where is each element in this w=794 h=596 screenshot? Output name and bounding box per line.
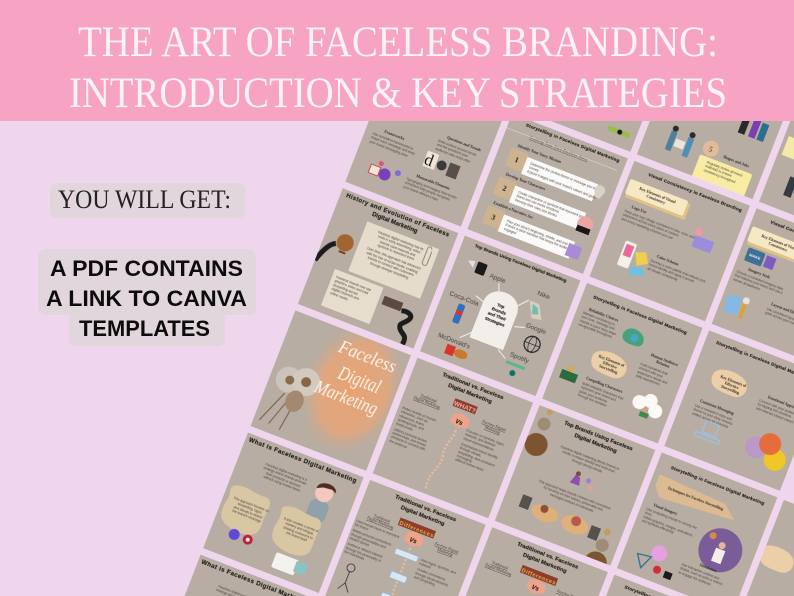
tombstone: Top (496, 302, 505, 310)
step 3: Ensure a clear narrative that keeps the audience (505, 223, 573, 252)
paper: main: symbols to represent them. (377, 243, 415, 262)
slide: storytelling steps (467, 113, 628, 274)
icon: dried flowers (259, 366, 320, 430)
slide: traditional vs differences: shared stories (349, 536, 370, 548)
slide: history and evolution: History and Evolution of Faceless (345, 193, 450, 239)
slide: storytelling circles: Key Elements of (720, 375, 747, 388)
step 2: 2 (501, 184, 508, 193)
slide: top brands circles (494, 405, 656, 566)
blob: right note: It also creates a sense of (283, 517, 319, 533)
slide: storytelling key elements: represent your brand and (580, 385, 616, 402)
slide: frameworks and identity: audience asks most often (435, 147, 471, 164)
slide: traditional vs differences: Uses human faces to represent (356, 519, 400, 539)
slide: frameworks and identity: your brand without a face (403, 185, 439, 202)
slide: traditional vs faceless what: Traditional vs. Faceless (441, 372, 504, 401)
icon: person (306, 483, 336, 522)
slide: storytelling key elements: Effective (602, 361, 618, 370)
slide: what is faceless: their products or services (265, 471, 301, 489)
slide: visual consistency banner: Consistency (646, 194, 666, 205)
blob: left note: and visuals to deliver (233, 505, 264, 520)
slide: top brands diagram: Coca-Cola (448, 290, 480, 308)
callout: pdf contents: TEMPLATES (79, 316, 210, 341)
slide: storytelling circles: theme so your story remains (693, 407, 733, 426)
slide: traditional vs faceless what: Focuses on symbols, logos, (466, 429, 505, 447)
paper: main: with the rise of social media, enabling (366, 251, 419, 274)
slide: storytelling techniques: Visual Imagery (653, 503, 678, 516)
slide: traditional vs faceless what: interaction, such as (400, 410, 428, 424)
slide: storytelling techniques: Utilize graphics, images, animations (643, 515, 693, 538)
title (69, 19, 727, 117)
paper: secondary: digital channels and (331, 287, 360, 301)
slide: storytelling steps: Crafting Your Own Faceless Story (529, 136, 588, 162)
paper: main: Over time, this approach has advanced (366, 246, 421, 271)
slide: top brands circles: Faceless digital marketing allows brands to (560, 445, 620, 471)
slide: visual consistency banner: all visuals consistently (647, 266, 679, 282)
slide: frameworks and identity: Use consistent frameworks to (372, 131, 414, 151)
slide: history and evolution: Digital Marketing (371, 212, 418, 235)
step 3: 3 (490, 213, 497, 222)
slide: what is faceless (203, 433, 364, 593)
paper: main: roots in early advertising, when (377, 235, 421, 255)
paper: secondary: graphics, video and bold (334, 279, 369, 296)
slide: traditional vs faceless what: Faceless Digital (482, 420, 506, 432)
step 3: Plan your story's beginning, middle, and end (506, 219, 568, 246)
slide: storytelling key elements: audience's needs and (637, 370, 668, 385)
step 3: Establish a Narrative Arc (493, 201, 534, 220)
slide: traditional vs faceless what: through visuals, (459, 446, 482, 458)
slide: storytelling key elements: Craft narratives that (640, 362, 668, 376)
slide: frameworks and identity (345, 121, 502, 226)
slide: visual consistency second: MAKE (749, 252, 762, 261)
slide: people and yellow note: consistency throughout (703, 168, 736, 184)
slide: frameworks and identity: Memorable Elements (416, 174, 451, 191)
slide: traditional vs faceless what: testimonials (396, 421, 414, 432)
blob: left note: storytelling, logos (237, 502, 263, 515)
slide: fragment right edge (746, 500, 794, 596)
tombstone (470, 291, 518, 350)
slide: storytelling circles: and relevant shared values (756, 406, 794, 424)
slide: traditional vs faceless what: mascots, and abstract (464, 432, 496, 448)
callout: pdf contents (38, 249, 256, 346)
slide: traditional vs third: Digital Marketing (484, 563, 512, 577)
slide: frameworks and identity: and the questions your (436, 143, 470, 159)
slide: traditional vs third: Traditional vs. Faceless (516, 542, 579, 571)
slide: storytelling techniques: Techniques for Faceless Storytelling (667, 486, 724, 511)
slide: traditional vs differences: Marketing (437, 548, 453, 557)
slide: traditional vs faceless what: Emphasizes brand identity (461, 442, 498, 460)
slide: traditional vs differences: Digital Marketing (366, 516, 394, 530)
slide: green fragment (551, 121, 642, 152)
slide: visual consistency second (712, 208, 794, 369)
slide: traditional vs differences: Uses logos, symbols, and (420, 558, 456, 575)
slide: traditional vs differences: Vs (408, 537, 418, 546)
step 2: Develop their roles and stories (515, 198, 558, 218)
slide: storytelling key elements: Key Elements of (598, 354, 625, 368)
slide: traditional vs faceless what: influencers, brand (399, 414, 425, 427)
slide: storytelling key elements (542, 283, 703, 443)
slide: storytelling fragment bottom (606, 574, 670, 596)
slide: top brands diagram: Nike (536, 290, 551, 301)
slide: storytelling key elements: through the narrative (577, 393, 607, 408)
slide: storytelling circles: Effective (724, 381, 739, 390)
paper: secondary (321, 269, 384, 324)
slide: traditional vs faceless what: Digital Marketing (447, 383, 493, 405)
slide: visual consistency banner: Logo Use (631, 205, 647, 215)
slide: traditional vs differences: the brand (354, 523, 369, 532)
slide: top brands diagram (420, 236, 580, 396)
slide: traditional vs faceless what: testimonials, and human (392, 431, 427, 448)
slide: people and yellow note (637, 121, 783, 200)
paper: main: brands to connect with customers (367, 256, 415, 277)
slide: storytelling key elements: Compelling Characters (585, 376, 623, 394)
slide: traditional vs differences: through the personality of (345, 546, 382, 563)
slide: faceless digital marketing cover: Marketing (311, 376, 381, 420)
slide: storytelling techniques: to engage the audience (678, 570, 712, 586)
slide: top brands circles: This approach helps brands connect with consumers (538, 479, 611, 511)
blob: right note (272, 506, 321, 556)
slide: storytelling key elements: Reliability Choices (588, 308, 619, 323)
slide: frameworks and identity: Typography and imagery that remain (406, 177, 457, 200)
slide: storytelling techniques: Simulation (699, 563, 718, 574)
slide: faceless digital marketing cover: Faceless (335, 336, 399, 378)
slide: top brands diagram: Google (525, 322, 547, 336)
slide: fragment top right (759, 121, 794, 216)
slide: visual consistency banner: Develop a color palette that reflects your (650, 259, 706, 284)
slide: visual consistency banner: placement across every piece of content (622, 213, 679, 238)
step 1: Identify Your Story Mission (517, 144, 562, 165)
slide: traditional vs third: Traditional (491, 561, 509, 571)
slide: storytelling techniques: story (644, 511, 653, 517)
slide: faceless digital marketing cover: Digital (334, 362, 384, 399)
slide: frameworks and identity: consistent help people recognize (404, 181, 451, 202)
slide: storytelling key elements: Storytelling in Faceless Digital Marketing (593, 294, 688, 335)
slide: frameworks and identity: Build content around trends (438, 139, 477, 157)
slide: visual consistency banner: Color Scheme (656, 255, 679, 267)
slide: storytelling techniques (617, 453, 777, 596)
slide: traditional vs third: Vs (530, 585, 540, 593)
title: INTRODUCTION & KEY STRATEGIES (69, 70, 727, 117)
slide: traditional vs third (466, 527, 608, 596)
slide: storytelling key elements: Storytelling (598, 364, 618, 375)
blob: left note: the brand's message (232, 509, 262, 524)
slide: storytelling techniques: and symbols effectively (641, 519, 675, 535)
blob: left note (221, 485, 270, 535)
slide: storytelling key elements: Maintain consistency in (582, 311, 616, 327)
step 1: convey (528, 165, 540, 173)
paper: main: through stronger storytelling (369, 261, 409, 280)
slide: traditional vs faceless what: messaging (456, 454, 473, 463)
slide: frameworks and identity: shape each campaign and keep (370, 135, 416, 156)
slide: traditional vs faceless what: Marketing (484, 426, 501, 435)
slide: traditional vs differences: Builds personal connections (352, 528, 392, 547)
icon: globe (336, 234, 354, 254)
tombstone: Strategies (484, 315, 506, 328)
slide: people and yellow note: Shapes and Jobs (722, 155, 750, 169)
slide: top brands circles: by focusing on their values, personality and (543, 485, 603, 512)
slide: people and yellow note: Regularly review all brand (706, 160, 743, 178)
slide: storytelling key elements: Relation (655, 360, 671, 369)
blob: right note: the brand itself (286, 531, 307, 543)
slide: top brands circles: create a unique identity and build trust (562, 450, 615, 474)
slide: visual consistency second: Choose a consistent imagery style (736, 269, 784, 291)
slide: storytelling key elements: connect with your (638, 366, 664, 379)
step 2: Develop Your Characters (505, 172, 546, 191)
slide: visual consistency second: that matches your brand and use it (734, 273, 783, 295)
step 3 (481, 200, 578, 259)
slide: traditional vs faceless what: Utilizes personal stories, (393, 427, 428, 444)
slide: traditional vs differences: through visual elements (415, 571, 449, 588)
slide: faceless digital marketing cover (250, 310, 411, 471)
slide: traditional vs differences: and storytelling (413, 575, 436, 587)
slide: frameworks and identity: your brand messaging clear (369, 139, 409, 158)
slide: traditional vs differences: the individuals (344, 550, 365, 561)
slide: top brands circles: through strong visuals (571, 458, 603, 474)
blob: right note: drawing customers to (283, 525, 314, 540)
slide: storytelling key elements: your tone, message and (581, 315, 615, 331)
paper: main (348, 221, 439, 299)
slide: visual consistency banner: and every marketing channel you use (621, 217, 674, 240)
slide: storytelling techniques: Storytelling in Faceless Digital Marketing (670, 465, 765, 506)
slide: what is faceless: What is Faceless Digital Marketing (248, 437, 358, 485)
step 2 (493, 172, 586, 228)
slide: traditional vs faceless what: visual representations (463, 436, 494, 452)
slide: traditional vs differences: Audience attracts interest (347, 542, 383, 559)
slide: traditional vs differences: through personalities and (351, 532, 387, 549)
slide: top brands circles: Top Brands Using Faceless (563, 420, 633, 452)
step 3: engaged (503, 227, 517, 235)
slide: what is faceless: Faceless digital marketing is a (265, 462, 308, 482)
slide: traditional vs faceless what: spokespeople, and (397, 418, 425, 431)
tombstone: Brands (491, 306, 507, 316)
slide: visual consistency banner: Key Elements of Visual (639, 187, 676, 204)
paper: secondary: online media (329, 291, 348, 301)
slide: visual consistency second: Imagery Style (747, 268, 771, 280)
tombstone: and Their (487, 311, 507, 322)
slide: people and yellow note: 5 (708, 145, 714, 154)
slide: storytelling key elements: visuals so your story stays (579, 319, 617, 336)
slide: storytelling circles: by tapping into emotions (757, 402, 792, 419)
icon: road (397, 308, 414, 346)
icon: road behind globe (314, 240, 336, 262)
slide: visual consistency banner: Keep your logo design consistent in size, color, and (624, 209, 695, 240)
slide: storytelling circles: unified across all channels (691, 411, 729, 429)
slide: storytelling circles (664, 330, 794, 491)
slide collage (184, 121, 794, 596)
step 1: 1 (514, 156, 520, 165)
step 1 (505, 144, 598, 202)
label: you will get: YOU WILL GET: (58, 185, 231, 214)
slide: top brands diagram: Top Brands Using Faceless Digital Marketing (474, 243, 568, 283)
slide: traditional vs faceless what: Digital Marketing (413, 396, 441, 410)
slide: traditional vs differences: Traditional (373, 514, 391, 524)
paper: secondary: storytelling across (332, 283, 359, 296)
slide: traditional vs faceless what (373, 358, 533, 518)
slide: traditional vs third: Differences (520, 568, 556, 587)
slide: traditional vs faceless what: WHAT? (453, 400, 477, 415)
slide: visual consistency banner: Visual Consistency in Faceless Branding (648, 172, 743, 213)
callout: pdf contents: A PDF CONTAINS (50, 256, 243, 281)
slide: storytelling key elements: daily experiences (635, 374, 661, 387)
step 2: brand and can evoke emotions (516, 194, 560, 214)
step 1: Determine the central theme or message you want to (530, 162, 603, 193)
slide: traditional vs third: Digital Marketing (522, 552, 568, 575)
slide: traditional vs differences: Faceless Digital (434, 542, 459, 555)
slide: what is faceless: without using human faces (263, 475, 301, 493)
slide: visual consistency second: across all platforms (733, 277, 761, 291)
slide: storytelling techniques: Use interactive content and (681, 562, 720, 581)
slide: history and evolution (298, 188, 458, 349)
slide: traditional vs differences: Traditional vs. Faceless (394, 494, 457, 523)
slide: visual consistency second: Consistency (768, 242, 788, 253)
slide: top brands diagram: Apple (488, 273, 507, 285)
paper: secondary: Faceless brands now use (336, 275, 372, 292)
slide: traditional vs differences: Differences (398, 521, 434, 539)
slide: storytelling key elements: Human Audience (650, 353, 679, 367)
slide: visual consistency banner (590, 161, 750, 321)
blob: left note: This approach focuses on (233, 496, 269, 513)
slide: storytelling steps: Storytelling in Faceless Digital Marketing (525, 122, 620, 163)
slide: top brands diagram: McDonald's (437, 332, 472, 351)
slide: what is faceless: strategy where brands promote (263, 466, 307, 486)
slide: traditional vs differences: mascots (418, 562, 432, 570)
slide: traditional vs faceless what: the audience (389, 439, 408, 449)
title: THE ART OF FACELESS BRANDING: (78, 19, 718, 66)
slide: traditional vs differences: Creates connections (416, 567, 446, 582)
slide: top brands circles: messages instead of individuals (549, 492, 594, 513)
step 2: Create characters or symbols that represent your (518, 190, 586, 220)
paper: main: Faceless digital marketing has its (377, 230, 424, 251)
slide: storytelling key elements: guide your audience (579, 389, 608, 404)
slide: top brands diagram: Spotify (509, 351, 530, 365)
slide: frameworks and identity: Frameworks (384, 130, 405, 141)
slide: traditional vs differences: Digital Marketing (400, 505, 446, 528)
slide: storytelling techniques: Use compelling visuals to convey the (646, 507, 698, 530)
slide: traditional vs faceless what: without human faces (455, 458, 484, 472)
slide: traditional vs faceless what: Traditional (420, 394, 437, 403)
slide: frameworks and identity: d (422, 150, 437, 171)
paper: main: brands used mascots and (379, 240, 416, 257)
slide: traditional vs faceless what: elements to connect with (390, 435, 426, 452)
slide: people and yellow note: materials to ensure (705, 164, 732, 178)
slide: storytelling key elements: Build relatable characters that (582, 381, 624, 401)
blob: right note: mystery and intrigue, (285, 522, 315, 536)
slide: storytelling circles: Consistent Messaging (699, 399, 734, 416)
slide: storytelling circles: Storytelling (720, 385, 740, 396)
slide: storytelling circles: Use a consistent voice and (694, 403, 733, 421)
header band (0, 0, 794, 121)
slide: traditional vs faceless what: storytelling, and consistent (458, 450, 495, 468)
slide: visual consistency banner: brand identity and apply it across (648, 262, 695, 284)
callout: pdf contents: A LINK TO CANVA (46, 286, 247, 311)
slide: storytelling techniques: stories, such as polls or videos, (679, 566, 724, 587)
slide: top brands circles: Digital Marketing (573, 433, 618, 455)
slide: traditional vs differences (325, 480, 486, 596)
slide: frameworks and identity: Questions and Trends (446, 136, 482, 153)
slide: traditional vs faceless what: Relies heavily on human (402, 406, 437, 423)
slide: traditional vs faceless what: Vs (454, 419, 464, 427)
step 1: Ensure it aligns with your brand's values and goals (527, 169, 597, 200)
slide: storytelling key elements: recognizable throughout (578, 322, 612, 339)
